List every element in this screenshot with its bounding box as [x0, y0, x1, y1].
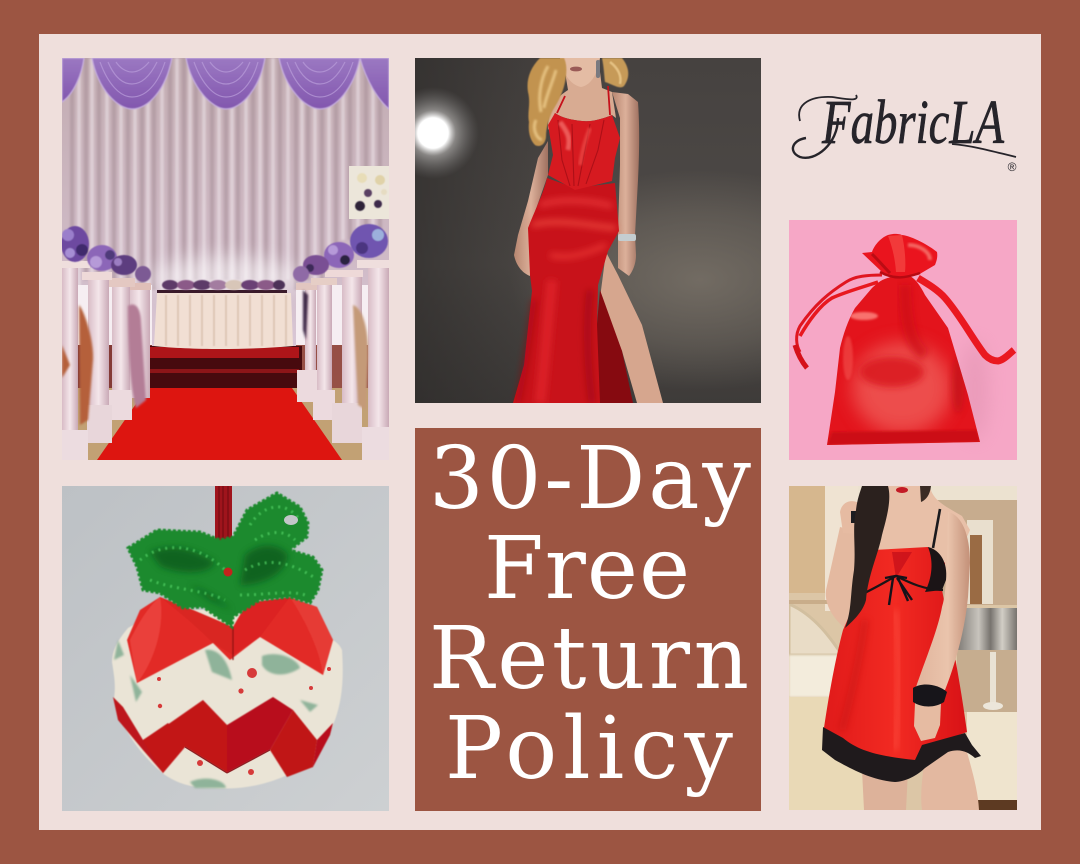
- holly shading: [150, 546, 288, 610]
- holly glitter: [140, 507, 315, 600]
- hand with phone: [840, 501, 866, 534]
- hair: [845, 486, 889, 628]
- ornament cream base: [112, 610, 343, 788]
- photo: woman in red satin gown: [415, 58, 761, 403]
- flower arrangements: [61, 224, 388, 282]
- gathered neck: [880, 272, 920, 277]
- title text: Return: [429, 609, 749, 709]
- headboard and bed: [789, 604, 842, 655]
- title text: 30-Day: [429, 429, 751, 529]
- stage steps: [140, 346, 302, 389]
- logo registered mark: ®: [1008, 160, 1017, 174]
- lens flare: [415, 90, 475, 176]
- photo: folded fabric Christmas ornament: [62, 486, 389, 811]
- title text: Free: [484, 519, 690, 619]
- title text: [429, 429, 751, 799]
- purple swags: [62, 58, 389, 109]
- hair right: [602, 58, 628, 87]
- corset bodice: [548, 113, 620, 190]
- hanging ribbon: [215, 486, 232, 548]
- glow behind table: [150, 256, 300, 300]
- logo flourish upper: [799, 95, 857, 121]
- curtain folds: [72, 58, 380, 290]
- bracelet: [618, 234, 636, 241]
- lips: [896, 487, 908, 493]
- room background: [789, 486, 1017, 810]
- wall below curtains behind columns: [78, 285, 152, 345]
- face: [560, 58, 600, 87]
- left columns: [62, 261, 151, 460]
- gown skirt: [513, 178, 619, 403]
- bag sheen: [827, 285, 980, 445]
- bracelets: [913, 685, 947, 706]
- head table: [154, 293, 293, 349]
- photo: wedding stage with purple drapes and red carpet: [61, 58, 389, 460]
- right arm: [612, 92, 639, 276]
- legs: [862, 770, 908, 810]
- red carpet: [97, 388, 342, 460]
- strap: [933, 509, 940, 548]
- column sashes: [62, 290, 368, 425]
- soft shadow: [966, 356, 984, 424]
- bodice trim: [858, 576, 943, 596]
- photo: red satin drawstring bag on pink: [789, 220, 1017, 460]
- hair left: [528, 58, 566, 146]
- wall below lamp: [957, 650, 1017, 712]
- black bow: [885, 576, 912, 605]
- logo: FabricLA: [793, 89, 1017, 174]
- logo flourish lower: [793, 118, 838, 158]
- holly berry: [224, 568, 232, 576]
- neck and chest: [548, 72, 616, 130]
- fabric pattern: [114, 640, 318, 788]
- earrings: [596, 60, 600, 78]
- title text: Policy: [445, 699, 733, 799]
- logo wordmark: FabricLA: [821, 89, 1005, 157]
- left arm: [826, 527, 878, 628]
- lips: [570, 67, 582, 71]
- upper red folds: [127, 597, 333, 683]
- bag ruffled top: [862, 234, 937, 277]
- inner skirt shadow: [597, 290, 633, 403]
- gap in holly leaf: [284, 515, 298, 525]
- left arm: [514, 141, 548, 276]
- straps: [557, 86, 610, 115]
- lower dark side areas: [78, 345, 152, 388]
- bust gather: [892, 552, 912, 578]
- lower red folds: [113, 697, 333, 777]
- right columns: [296, 260, 389, 460]
- table flowers: [162, 280, 285, 290]
- floor: [78, 388, 368, 460]
- black lace cup: [925, 547, 946, 592]
- holly leaves: [128, 493, 322, 627]
- photo: woman in red lace-trim chemise: [789, 486, 1017, 810]
- leg: [600, 252, 663, 403]
- picture frame with flowers: [349, 166, 389, 219]
- logo tail swash: [952, 144, 1016, 157]
- drawstrings: [797, 275, 882, 352]
- title box: [415, 428, 761, 811]
- torso and shoulders: [865, 486, 970, 580]
- satin highlights: [518, 201, 616, 403]
- hand: [914, 703, 941, 741]
- right arm: [915, 512, 970, 690]
- lace hem: [822, 727, 981, 782]
- lamp: [958, 608, 1017, 650]
- satin shadows and highlights: [842, 620, 865, 730]
- chemise: [823, 547, 967, 775]
- bag body: [827, 275, 980, 445]
